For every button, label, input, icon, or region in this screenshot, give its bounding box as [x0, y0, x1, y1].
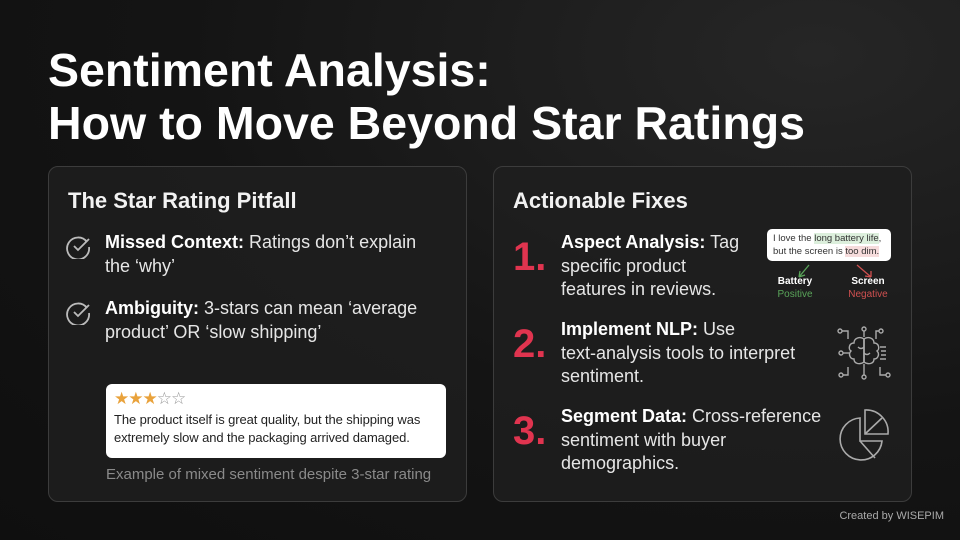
icon: check	[66, 236, 90, 259]
item 2: sentiment.	[561, 366, 644, 386]
item 3: sentiment with buyer	[561, 430, 726, 450]
item 3: 3.	[513, 409, 546, 453]
item 1: features in reviews.	[561, 279, 716, 299]
icon: check	[66, 302, 90, 325]
icon: brain circuit	[837, 326, 891, 380]
title: How to Move Beyond Star Ratings	[48, 97, 805, 149]
aspect example: Battery	[778, 276, 812, 287]
aspect example: Screen	[851, 276, 885, 287]
item 2	[513, 319, 795, 386]
review text: The product itself is great quality, but the shipping was	[114, 412, 420, 427]
caption: Example of mixed sentiment despite 3-star rating	[106, 466, 431, 483]
item 1: specific product	[561, 256, 686, 276]
item 2: 2.	[513, 322, 546, 366]
item 1: Aspect Analysis: Tag	[561, 232, 739, 252]
aspect example: I love the long battery life, but the screen is too dim.	[773, 233, 881, 257]
panel: actionable fixes	[493, 166, 912, 502]
panel: star rating pitfall	[48, 166, 467, 502]
aspect example	[767, 229, 891, 300]
aspect example: Positive	[777, 289, 812, 300]
aspect example: Negative	[848, 289, 888, 300]
item 3: Segment Data: Cross-reference	[561, 406, 821, 426]
item 1: 1.	[513, 235, 546, 279]
heading: The Star Rating Pitfall	[68, 188, 297, 213]
review card	[106, 384, 446, 458]
item 3: demographics.	[561, 453, 679, 473]
item 3	[513, 406, 821, 473]
item 2: Implement NLP: Use	[561, 319, 735, 339]
heading: Actionable Fixes	[513, 188, 688, 213]
bullet: ambiguity: product’ OR ‘slow shipping’	[105, 322, 321, 342]
review text	[114, 412, 420, 445]
bullet: ambiguity	[66, 298, 417, 342]
bullet: missed context	[66, 232, 416, 276]
stars: ★★★☆☆	[114, 389, 185, 408]
item 1	[513, 232, 739, 299]
footer credit: Created by WISEPIM	[839, 510, 944, 522]
bullet: ambiguity: Ambiguity: 3-stars can mean ‘average	[105, 298, 417, 318]
icon: pie chart	[839, 409, 889, 461]
review text: extremely slow and the packaging arrived damaged.	[114, 430, 410, 445]
title: Sentiment Analysis:	[48, 44, 491, 96]
item 2: text-analysis tools to interpret	[561, 342, 795, 362]
title	[48, 44, 805, 149]
bullet: missed context: the ‘why’	[105, 256, 175, 276]
bullet: missed context: Missed Context: Ratings don’t explain	[105, 232, 416, 252]
